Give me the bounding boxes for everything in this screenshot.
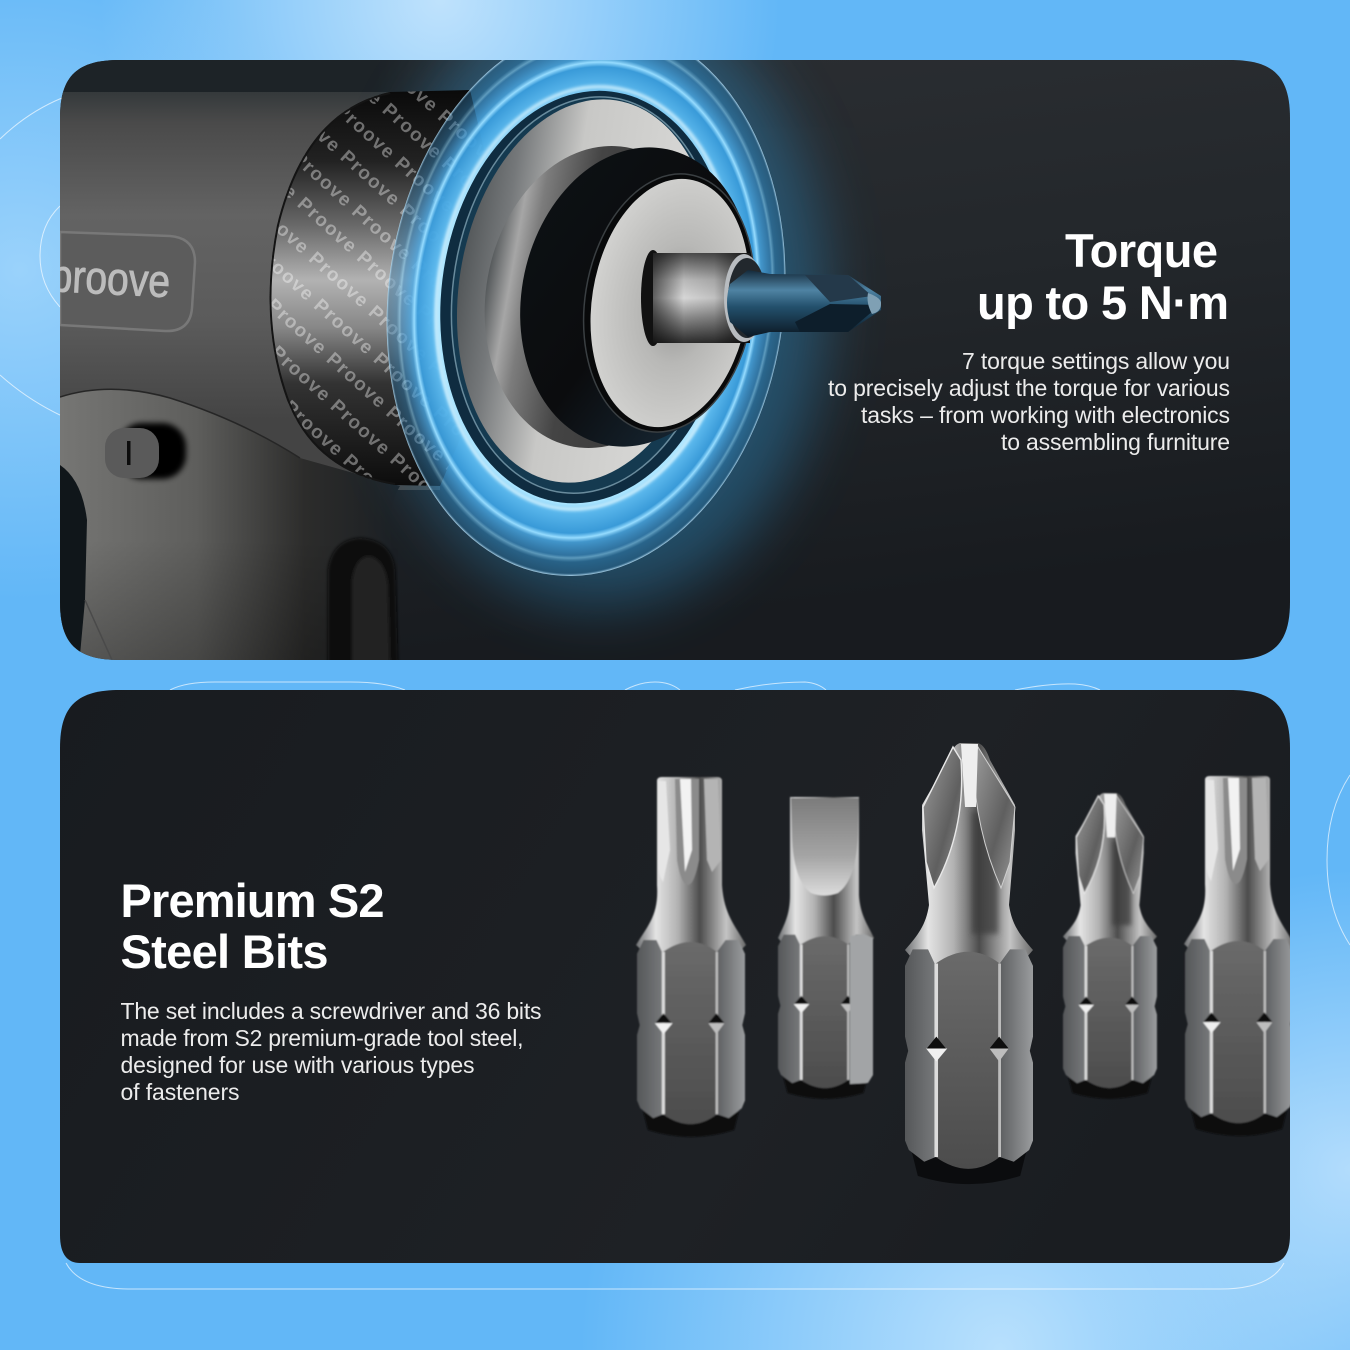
cone behind dark ring [484,146,634,448]
heading: Torque [1065,224,1218,277]
patterned barrel: Proove Proove Proove Proove Proove Proove Proove Proove [212,0,697,432]
glowing torque ring [386,60,786,576]
bit: torx left [636,777,746,1137]
switch button [105,423,186,479]
front disc [582,173,754,433]
patterned barrel: Proove Proove Proove Proove Proove Proove Proove Proove [45,229,530,669]
handle [60,389,400,660]
screwdriver body [60,60,480,660]
heading [980,234,1226,329]
description: to precisely adjust the torque for various [828,375,1230,401]
description: of fasteners [120,1079,240,1105]
description: 7 torque settings allow you [962,348,1230,374]
description [828,348,1230,455]
description: designed for use with various types [120,1052,474,1078]
patterned barrel: Proove Proove Proove Proove Proove Proove Proove Proove [259,0,744,432]
description: to assembling furniture [1001,429,1230,455]
bit: torx right [1184,776,1294,1136]
heading: up to 5 N·m [977,276,1229,329]
logo plate [49,232,195,331]
black ring [520,147,740,447]
description: made from S2 premium-grade tool steel, [120,1025,524,1051]
patterned barrel: Proove Proove Proove Proove Proove Proove Proove Proove [217,39,702,479]
silver plate [457,99,690,483]
patterned barrel: Proove Proove Proove Proove Proove Proove Proove Proove [41,182,526,622]
heading [122,882,383,968]
panel: steel bits [60,690,1294,1290]
bit: flat head [778,797,874,1099]
collar shaft [641,250,766,346]
bit: phillips large [905,743,1033,1184]
description: The set includes a screwdriver and 36 bits [120,998,542,1024]
bit: phillips small [1063,793,1157,1099]
trigger [328,538,398,665]
logo text: proove [49,250,171,308]
patterned barrel: Proove Proove Proove Proove Proove Proove Proove Proove [126,87,611,527]
patterned barrel: Proove Proove Proove Proove Proove Proove Proove Proove [131,134,616,574]
patterned barrel: Proove Proove Proove Proove Proove Proove Proove Proove [88,181,573,621]
description: tasks – from working with electronics [861,402,1230,428]
heading: Premium S2 [120,874,384,927]
heading: Steel Bits [120,925,328,978]
patterned barrel: Proove Proove Proove Proove Proove Proove Proove Proove [84,134,569,574]
description [120,998,542,1105]
patterned barrel: Proove Proove Proove Proove Proove Proove Proove Proove [169,40,654,480]
glow halo [375,0,825,605]
patterned barrel: Proove Proove Proove Proove Proove Proove Proove Proove [0,229,483,669]
patterned barrel [270,90,478,486]
blue screwdriver bit [727,270,881,337]
patterned barrel: Proove Proove Proove Proove Proove Proove Proove Proove [174,86,659,526]
panel: torque [60,60,1290,660]
